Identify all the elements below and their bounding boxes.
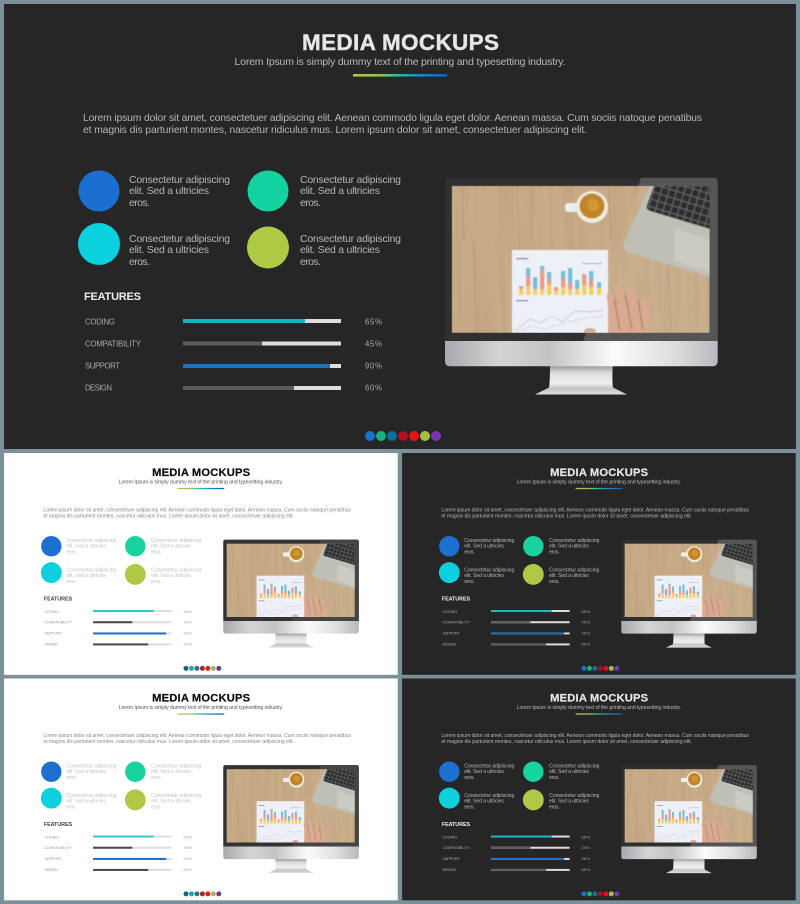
- intro paragraph: et magnis dis parturient montes, nascetur ridiculus mus. Lorem ipsum dolor sit amet, consectetuer adipiscing elit.: [43, 739, 294, 745]
- monitor mockup: [223, 540, 359, 648]
- progress chart: 65%: [365, 318, 382, 326]
- items with circles: [41, 536, 201, 585]
- progress chart: DESIGN: [44, 867, 58, 872]
- items with circles: eros.: [151, 775, 162, 781]
- progress chart: CODING: [44, 609, 59, 614]
- items with circles: eros.: [66, 775, 77, 781]
- progress chart: 90%: [582, 856, 591, 861]
- progress chart: COMPATIBILITY: [85, 340, 142, 348]
- progress chart: SUPPORT: [44, 856, 62, 861]
- progress chart: SUPPORT: [85, 362, 120, 370]
- pagination dots: [184, 666, 221, 671]
- items with circles: Consectetur adipiscing: [464, 764, 515, 770]
- items with circles: elit. Sed a ultricies: [464, 799, 504, 805]
- features heading: FEATURES: [84, 291, 141, 303]
- monitor mockup: [223, 765, 359, 873]
- progress chart: [44, 609, 193, 647]
- items with circles: elit. Sed a ultricies: [66, 799, 106, 805]
- items with circles: Consectetur adipiscing: [549, 793, 599, 799]
- subtitle: Lorem Ipsum is simply dummy text of the printing and typesetting industry.: [119, 705, 283, 711]
- gradient rule: [178, 713, 224, 715]
- items with circles: Consectetur adipiscing: [549, 764, 599, 770]
- gradient rule: [576, 713, 622, 715]
- item: cyan circle with text: Consectetur adipiscing: [129, 233, 230, 245]
- items with circles: elit. Sed a ultricies: [151, 544, 191, 550]
- item: green circle with text: eros.: [300, 197, 321, 209]
- progress chart: 60%: [184, 642, 193, 647]
- items with circles: eros.: [549, 550, 560, 556]
- intro paragraph: Lorem ipsum dolor sit amet, consectetuer adipiscing elit. Aenean commodo ligula eget dolor. Aenean massa. Cum sociis natoque penatibus: [43, 507, 351, 513]
- item: blue circle with text: eros.: [129, 197, 150, 209]
- items with circles: elit. Sed a ultricies: [66, 544, 106, 550]
- progress chart: [442, 609, 591, 647]
- panel: dark slide bottom right: [402, 678, 796, 900]
- monitor mockup: [621, 765, 757, 873]
- intro paragraph: Lorem ipsum dolor sit amet, consectetuer adipiscing elit. Aenean commodo ligula eget dolor. Aenean massa. Cum sociis natoque penatibus: [441, 507, 749, 513]
- intro paragraph: [441, 733, 749, 745]
- progress chart: 90%: [365, 362, 382, 370]
- progress chart: CODING: [442, 834, 457, 839]
- progress chart: 65%: [184, 834, 193, 839]
- item: green circle with text: Consectetur adipiscing: [300, 174, 401, 186]
- items with circles: eros.: [549, 579, 560, 585]
- items with circles: Consectetur adipiscing: [549, 538, 599, 544]
- items with circles: eros.: [464, 550, 475, 556]
- pagination dots: [184, 891, 221, 896]
- progress chart: SUPPORT: [442, 631, 460, 636]
- intro paragraph: et magnis dis parturient montes, nascetur ridiculus mus. Lorem ipsum dolor sit amet, consectetuer adipiscing elit.: [441, 739, 692, 745]
- progress chart: DESIGN: [442, 867, 456, 872]
- items with circles: elit. Sed a ultricies: [549, 573, 589, 579]
- items with circles: eros.: [151, 550, 162, 556]
- progress chart: 45%: [582, 845, 591, 850]
- progress chart: CODING: [44, 834, 59, 839]
- title: MEDIA MOCKUPS: [152, 692, 251, 704]
- item: lime circle with text: eros.: [300, 256, 321, 268]
- intro paragraph: [83, 113, 702, 136]
- items with circles: eros.: [151, 805, 162, 811]
- progress chart: 90%: [184, 856, 193, 861]
- item: cyan circle with text: eros.: [129, 256, 150, 268]
- items with circles: elit. Sed a ultricies: [151, 573, 191, 579]
- item: blue circle with text: [78, 170, 230, 212]
- progress chart: CODING: [442, 609, 457, 614]
- panel: main dark slide: [4, 4, 796, 449]
- intro paragraph: Lorem ipsum dolor sit amet, consectetuer adipiscing elit. Aenean commodo ligula eget dolor. Aenean massa. Cum sociis natoque penatibus: [43, 733, 351, 739]
- progress chart: 45%: [582, 620, 591, 625]
- items with circles: [439, 536, 599, 585]
- items with circles: elit. Sed a ultricies: [151, 769, 191, 775]
- items with circles: eros.: [151, 579, 162, 585]
- progress chart: 60%: [184, 867, 193, 872]
- progress chart: 65%: [582, 834, 591, 839]
- features heading: FEATURES: [44, 597, 73, 603]
- items with circles: elit. Sed a ultricies: [549, 769, 589, 775]
- intro paragraph: [441, 507, 749, 519]
- title: MEDIA MOCKUPS: [302, 30, 499, 55]
- title: MEDIA MOCKUPS: [152, 467, 251, 479]
- progress chart: COMPATIBILITY: [44, 620, 73, 625]
- intro paragraph: [43, 507, 351, 519]
- progress chart: 65%: [582, 609, 591, 614]
- features heading: FEATURES: [442, 597, 471, 603]
- intro paragraph: et magnis dis parturient montes, nascetur ridiculus mus. Lorem ipsum dolor sit amet, consectetuer adipiscing elit.: [441, 513, 692, 519]
- progress chart: CODING: [85, 318, 115, 326]
- subtitle: Lorem Ipsum is simply dummy text of the printing and typesetting industry.: [517, 705, 681, 711]
- panel: dark slide top right: [402, 453, 796, 675]
- items with circles: Consectetur adipiscing: [464, 538, 515, 544]
- items with circles: eros.: [66, 579, 77, 585]
- items with circles: Consectetur adipiscing: [66, 568, 117, 574]
- progress chart: 60%: [582, 642, 591, 647]
- gradient rule: [353, 74, 447, 77]
- progress chart: 60%: [365, 384, 382, 392]
- item: blue circle with text: elit. Sed a ultricies: [129, 185, 209, 197]
- title: MEDIA MOCKUPS: [550, 467, 649, 479]
- items with circles: eros.: [66, 805, 77, 811]
- progress chart: DESIGN: [44, 642, 58, 647]
- progress chart: [442, 834, 591, 872]
- item: cyan circle with text: elit. Sed a ultricies: [129, 244, 209, 256]
- title: MEDIA MOCKUPS: [550, 692, 649, 704]
- progress chart: 65%: [184, 609, 193, 614]
- items with circles: eros.: [549, 775, 560, 781]
- items with circles: [439, 761, 599, 811]
- gradient rule: [178, 488, 224, 489]
- items with circles: Consectetur adipiscing: [66, 764, 117, 770]
- progress chart: COMPATIBILITY: [442, 845, 471, 850]
- item: lime circle with text: Consectetur adipiscing: [300, 233, 401, 245]
- progress chart: 60%: [582, 867, 591, 872]
- subtitle: Lorem Ipsum is simply dummy text of the printing and typesetting industry.: [517, 479, 681, 485]
- items with circles: eros.: [464, 579, 475, 585]
- monitor mockup: [445, 178, 718, 394]
- subtitle: Lorem Ipsum is simply dummy text of the printing and typesetting industry.: [234, 56, 566, 68]
- items with circles: Consectetur adipiscing: [151, 538, 201, 544]
- intro paragraph: et magnis dis parturient montes, nascetur ridiculus mus. Lorem ipsum dolor sit amet, consectetuer adipiscing elit.: [43, 513, 294, 519]
- progress chart: DESIGN: [442, 642, 456, 647]
- items with circles: Consectetur adipiscing: [464, 568, 515, 574]
- monitor mockup: [621, 540, 757, 648]
- item: green circle with text: [248, 170, 401, 212]
- items with circles: elit. Sed a ultricies: [464, 769, 504, 775]
- items with circles: Consectetur adipiscing: [464, 793, 515, 799]
- pagination dots: [365, 431, 441, 441]
- pagination dots: [582, 891, 619, 896]
- items with circles: Consectetur adipiscing: [151, 764, 201, 770]
- progress chart: DESIGN: [85, 384, 112, 392]
- items with circles: elit. Sed a ultricies: [464, 544, 504, 550]
- items with circles: Consectetur adipiscing: [66, 538, 117, 544]
- item: lime circle with text: elit. Sed a ultricies: [300, 244, 380, 256]
- features heading: FEATURES: [44, 822, 73, 828]
- progress chart: [44, 834, 193, 872]
- items with circles: eros.: [464, 775, 475, 781]
- items with circles: elit. Sed a ultricies: [66, 573, 106, 579]
- progress chart: 45%: [184, 845, 193, 850]
- intro paragraph: et magnis dis parturient montes, nascetur ridiculus mus. Lorem ipsum dolor sit amet, consectetuer adipiscing elit.: [83, 125, 587, 136]
- progress chart: SUPPORT: [442, 856, 460, 861]
- progress chart: 90%: [184, 631, 193, 636]
- items with circles: Consectetur adipiscing: [66, 793, 117, 799]
- progress chart: 45%: [365, 340, 382, 348]
- features heading: FEATURES: [442, 822, 471, 828]
- item: green circle with text: elit. Sed a ultricies: [300, 185, 380, 197]
- progress chart: SUPPORT: [44, 631, 62, 636]
- item: lime circle with text: [247, 226, 401, 268]
- items with circles: Consectetur adipiscing: [151, 793, 201, 799]
- items with circles: Consectetur adipiscing: [549, 568, 599, 574]
- items with circles: [41, 761, 201, 811]
- intro paragraph: [43, 733, 351, 745]
- intro paragraph: Lorem ipsum dolor sit amet, consectetuer adipiscing elit. Aenean commodo ligula eget dolor. Aenean massa. Cum sociis natoque penatibus: [441, 733, 749, 739]
- progress chart: 90%: [582, 631, 591, 636]
- items with circles: eros.: [464, 805, 475, 811]
- items with circles: eros.: [66, 550, 77, 556]
- progress chart: 45%: [184, 620, 193, 625]
- panel: light slide bottom left: [4, 678, 398, 900]
- items with circles: Consectetur adipiscing: [151, 568, 201, 574]
- progress chart: [85, 318, 382, 392]
- item: cyan circle with text: [78, 223, 230, 268]
- progress chart: COMPATIBILITY: [442, 620, 471, 625]
- items with circles: elit. Sed a ultricies: [66, 769, 106, 775]
- progress chart: COMPATIBILITY: [44, 845, 73, 850]
- items with circles: elit. Sed a ultricies: [549, 544, 589, 550]
- items with circles: elit. Sed a ultricies: [151, 799, 191, 805]
- items with circles: elit. Sed a ultricies: [549, 799, 589, 805]
- pagination dots: [582, 666, 619, 671]
- subtitle: Lorem Ipsum is simply dummy text of the printing and typesetting industry.: [119, 479, 283, 485]
- panel: light slide top left: [4, 453, 398, 675]
- intro paragraph: Lorem ipsum dolor sit amet, consectetuer adipiscing elit. Aenean commodo ligula eget dolor. Aenean massa. Cum sociis natoque penatibus: [83, 113, 702, 124]
- items with circles: elit. Sed a ultricies: [464, 573, 504, 579]
- gradient rule: [576, 488, 622, 489]
- item: blue circle with text: Consectetur adipiscing: [129, 174, 230, 186]
- items with circles: eros.: [549, 805, 560, 811]
